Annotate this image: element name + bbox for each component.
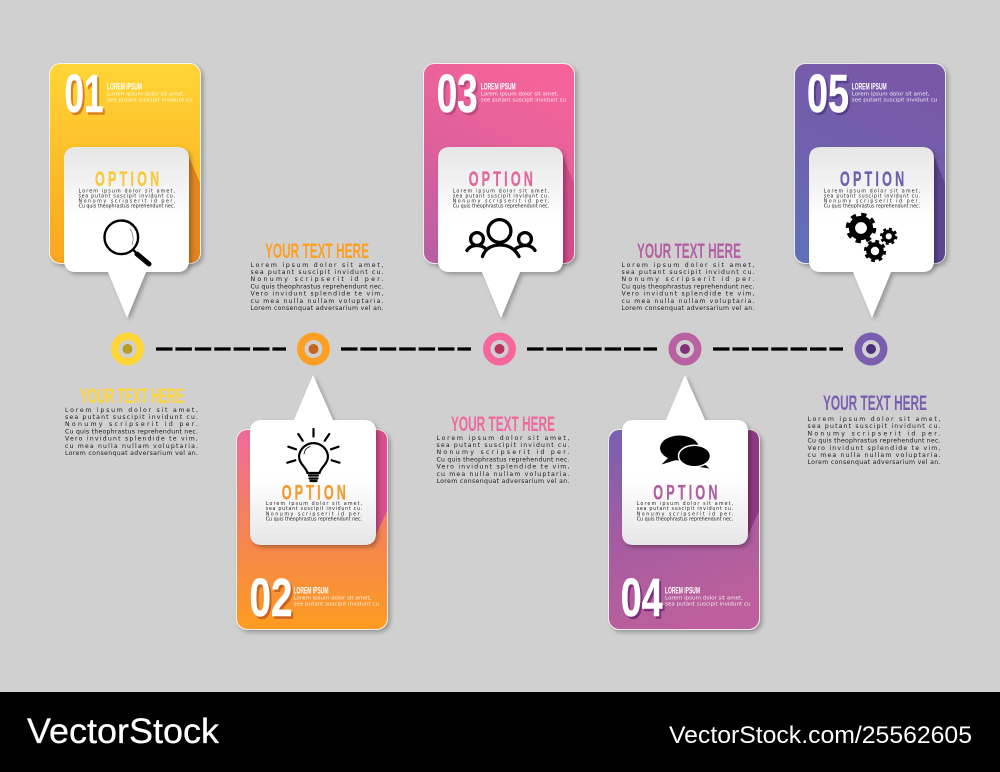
card 01 xyxy=(50,64,200,318)
card 05 caption: see putant suscipit invidunt cu xyxy=(852,98,938,104)
card 03 panel text: Nonumy scripserit id per. xyxy=(453,199,549,205)
text block 4 body: Lorem ipsum dolor sit amet, xyxy=(622,262,755,269)
card 03 side shade xyxy=(563,157,574,263)
card 03 caption: see putant suscipit invidunt cu xyxy=(481,98,567,104)
card 03 caption: Lorem ipsum dolor sit amet, xyxy=(481,92,559,98)
card 03 panel text: sea putant suscipit invidunt cu. xyxy=(453,194,549,200)
card 05 panel text: sea putant suscipit invidunt cu. xyxy=(824,194,920,200)
card 04 panel text xyxy=(637,501,734,522)
card 05 panel text: Nonumy scripserit id per. xyxy=(824,199,920,205)
dashed connector 1 xyxy=(156,347,286,351)
text block 1 title: YOUR TEXT HERE xyxy=(80,384,184,408)
card 01 caption: LOREM IPSUM xyxy=(107,82,142,92)
card 05 panel text: Cu quis theophrastus reprehendunt nec. xyxy=(824,204,920,210)
footer logo: VectorStock xyxy=(27,712,220,751)
card 04 caption xyxy=(665,586,751,608)
dashed connector 3 xyxy=(527,347,657,351)
text block 4 body: sea putant suscipit invidunt cu. xyxy=(622,269,755,276)
dashed connector 2 xyxy=(341,347,471,351)
card 03 number xyxy=(437,64,480,126)
text block 1 body xyxy=(65,407,198,457)
marker 4 xyxy=(668,332,702,366)
text block 2 body: Vero invidunt splendide te vim, xyxy=(250,291,384,298)
text block 2 body: Cu quis theophrastus reprehendunt nec. xyxy=(250,283,384,290)
text block 5 body: cu mea nulla nullam voluptaria. xyxy=(808,452,941,459)
text block 4 xyxy=(622,239,755,312)
card 02 background xyxy=(236,430,388,630)
card 02 caption xyxy=(294,586,379,608)
icon: speech bubbles xyxy=(660,436,710,468)
text block 2 title: YOUR TEXT HERE xyxy=(265,239,369,263)
card 05 number: 05 xyxy=(807,64,849,124)
card 04 number: 04 xyxy=(623,570,665,630)
text block 4 body: Nonumy scripserit id per. xyxy=(622,276,755,283)
card 01 caption: Lorem ipsum dolor sit amet, xyxy=(107,92,185,98)
card 01 number xyxy=(64,64,106,126)
text block 3 title: YOUR TEXT HERE xyxy=(451,412,555,436)
card 02 panel text: Cu quis theophrastus reprehendunt nec. xyxy=(266,516,362,522)
card 03 xyxy=(424,64,574,318)
text block 1 body: Lorem consenquat adversarium vel an. xyxy=(65,450,198,457)
text block 1 body: Vero invidunt splendide te vim, xyxy=(65,436,198,443)
card 05 caption xyxy=(852,82,938,104)
card 03 panel text: Lorem ipsum dolor sit amet, xyxy=(453,188,550,194)
card 04 background xyxy=(608,430,760,630)
footer image id: VectorStock.com/25562605 xyxy=(669,722,972,749)
card 01 option heading: OPTION xyxy=(95,167,159,191)
card 01 background xyxy=(50,64,200,264)
text block 2 body: cu mea nulla nullam voluptaria. xyxy=(250,298,384,305)
text block 2 body: Lorem consenquat adversarium vel an. xyxy=(250,305,384,312)
text block 5 body: Nonumy scripserit id per. xyxy=(808,430,941,437)
text block 1 body: Cu quis theophrastus reprehendunt nec. xyxy=(65,428,198,435)
text block 5 body: Cu quis theophrastus reprehendunt nec. xyxy=(808,438,941,445)
card 04 white pin panel xyxy=(622,375,748,545)
footer bar xyxy=(0,692,1000,772)
text block 5 body: Lorem ipsum dolor sit amet, xyxy=(808,416,941,423)
text block 2 xyxy=(250,239,384,312)
text block 4 body xyxy=(622,262,755,312)
card 02 panel text xyxy=(266,501,363,522)
card 04 caption: Lorem ipsum dolor sit amet, xyxy=(665,596,743,602)
card 01 panel text: Nonumy scripserit id per. xyxy=(78,199,175,205)
card 03 white pin panel xyxy=(438,147,563,318)
text block 1 xyxy=(65,384,198,457)
card 05 panel text: Lorem ipsum dolor sit amet, xyxy=(824,188,921,194)
text block 4 body: cu mea nulla nullam voluptaria. xyxy=(622,298,755,305)
timeline xyxy=(111,332,888,366)
card 04 panel text: Nonumy scripserit id per. xyxy=(637,511,733,517)
card 02 number: 02 xyxy=(252,570,294,630)
text block 5 body xyxy=(808,416,941,466)
card 04 number: 04 xyxy=(621,568,663,628)
card 01 caption xyxy=(107,82,193,104)
text block 4 title: YOUR TEXT HERE xyxy=(637,239,741,263)
card 01 caption: see putant suscipit invidunt cu xyxy=(107,98,193,104)
text block 5 body: Lorem consenquat adversarium vel an. xyxy=(808,459,941,466)
icon: magnifying glass xyxy=(104,220,149,264)
text block 4 body: Cu quis theophrastus reprehendunt nec. xyxy=(622,283,755,290)
card 05 number: 05 xyxy=(809,66,851,126)
card 03 caption xyxy=(481,82,567,104)
card 03 option heading: OPTION xyxy=(469,167,533,191)
text block 3 body xyxy=(436,435,570,485)
card 04 panel text: sea putant suscipit invidunt cu. xyxy=(637,506,733,512)
card 05 white pin panel xyxy=(809,147,934,318)
card 01 side shade xyxy=(189,157,200,263)
text block 2 body xyxy=(250,262,384,312)
text block 1 body: Lorem ipsum dolor sit amet, xyxy=(65,407,198,414)
card 02 caption: LOREM IPSUM xyxy=(294,586,329,596)
card 04 panel text: Lorem ipsum dolor sit amet, xyxy=(637,501,734,507)
card 03 panel text xyxy=(453,188,550,210)
icon: gears xyxy=(848,214,896,261)
card 05 side shade xyxy=(934,157,945,263)
marker 3 xyxy=(483,332,516,366)
card 01 panel text: sea putant suscipit invidunt cu. xyxy=(78,194,175,200)
card 03 number: 03 xyxy=(439,66,480,126)
card 01 panel text xyxy=(78,188,175,210)
text block 3 body: Cu quis theophrastus reprehendunt nec. xyxy=(436,456,570,463)
card 04 caption: sea putant suscipit invidunt cu xyxy=(665,602,751,608)
text block 4 body: Vero invidunt splendide te vim, xyxy=(622,291,755,298)
text block 3 body: Nonumy scripserit id per. xyxy=(436,449,570,456)
card 02 caption: Lorem ipsum dolor sit amet, xyxy=(294,596,372,602)
marker 1 xyxy=(111,332,144,366)
card 05 caption: LOREM IPSUM xyxy=(852,82,887,92)
marker 2 xyxy=(297,332,330,366)
card 05 background xyxy=(794,64,946,264)
text block 3 body: Lorem ipsum dolor sit amet, xyxy=(436,435,570,442)
marker 5 xyxy=(854,332,888,366)
card 03 number: 03 xyxy=(437,64,478,124)
card 02 panel text: Nonumy scripserit id per. xyxy=(266,511,362,517)
dashed connector 4 xyxy=(713,347,843,351)
card 04 side shade xyxy=(748,430,759,535)
card 02 panel text: sea putant suscipit invidunt cu. xyxy=(266,506,362,512)
text block 5 xyxy=(808,391,941,466)
icon: light bulb xyxy=(287,429,340,481)
card 03 caption: LOREM IPSUM xyxy=(481,82,516,92)
card 01 panel text: Lorem ipsum dolor sit amet, xyxy=(78,188,175,194)
card 04 panel text: Cu quis theophrastus reprehendunt nec. xyxy=(637,516,733,522)
text block 3 body: cu mea nulla nullam voluptaria. xyxy=(436,471,570,478)
card 01 number: 01 xyxy=(66,66,106,126)
text block 1 body: cu mea nulla nullam voluptaria. xyxy=(65,443,198,450)
card 01 white pin panel xyxy=(64,147,189,318)
text block 1 body: sea putant suscipit invidunt cu. xyxy=(65,414,198,421)
text block 3 body: Vero invidunt splendide te vim, xyxy=(436,464,570,471)
text block 2 body: Lorem ipsum dolor sit amet, xyxy=(250,262,384,269)
card 05 xyxy=(794,64,946,318)
text block 5 body: Vero invidunt splendide te vim, xyxy=(808,445,941,452)
card 02 side shade xyxy=(376,430,387,535)
text block 2 body: Nonumy scripserit id per. xyxy=(250,276,384,283)
card 02 xyxy=(236,375,388,630)
text block 3 body: Lorem consenquat adversarium vel an. xyxy=(436,478,570,485)
card 04 xyxy=(608,375,760,630)
card 02 white pin panel xyxy=(250,375,376,545)
card 02 number: 02 xyxy=(250,568,292,628)
card 03 background xyxy=(424,64,574,264)
card 05 option heading: OPTION xyxy=(840,167,904,191)
card 02 panel text: Lorem ipsum dolor sit amet, xyxy=(266,501,363,507)
card 05 panel text xyxy=(824,188,921,210)
text block 3 body: sea putant suscipit invidunt cu. xyxy=(436,442,570,449)
text block 2 body: sea putant suscipit invidunt cu. xyxy=(250,269,384,276)
card 02 caption: see putant suscipit invidunt cu xyxy=(294,602,379,608)
card 05 caption: Lorem ipsum dolor sit amet, xyxy=(852,92,930,98)
text block 3 xyxy=(436,412,570,485)
text block 1 body: Nonumy scripserit id per. xyxy=(65,421,198,428)
card 02 option heading: OPTION xyxy=(282,480,346,504)
text block 4 body: Lorem consenquat adversarium vel an. xyxy=(622,305,755,312)
card 04 option heading: OPTION xyxy=(653,480,717,504)
text block 5 body: sea putant suscipit invidunt cu. xyxy=(808,423,941,430)
card 04 caption: LOREM IPSUM xyxy=(665,586,700,596)
card 01 number: 01 xyxy=(64,64,104,124)
card 01 panel text: Cu quis theophrastus reprehendunt nec. xyxy=(78,204,175,210)
icon: group of people xyxy=(467,220,535,256)
card 03 panel text: Cu quis theophrastus reprehendunt nec. xyxy=(453,204,549,210)
